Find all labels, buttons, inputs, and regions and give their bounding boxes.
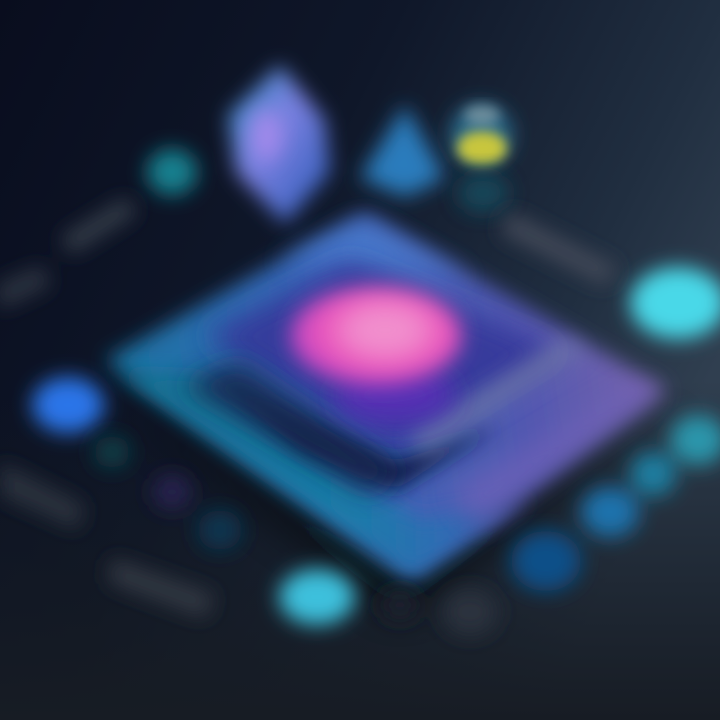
dashes upper left [0, 198, 138, 310]
lower dashes [0, 462, 215, 618]
upper blue glow [280, 222, 470, 280]
icon: yellow orb [450, 104, 512, 213]
pink orb highlight [340, 304, 430, 356]
pink orb [290, 286, 462, 386]
node: cyan bottom [279, 569, 355, 625]
central platform [105, 212, 668, 578]
inner dark tray [205, 262, 560, 450]
dark band [180, 360, 400, 495]
icon: crystal gem [228, 65, 330, 224]
dash upper right [500, 212, 618, 285]
lower right light panel [450, 385, 655, 525]
platform shadow [100, 390, 690, 610]
grey ridge [410, 338, 585, 455]
platform front edge [118, 372, 530, 578]
platform top surface [105, 212, 668, 578]
dark recess lower left [205, 372, 500, 490]
right node row [511, 415, 720, 591]
lower left small nodes [94, 436, 242, 550]
node: cyan pill right [630, 267, 720, 339]
node: blue left [32, 377, 104, 433]
purple under glow [335, 367, 455, 423]
bottom grey nodes [380, 588, 498, 636]
icon: blue pyramid [360, 105, 445, 197]
icon: teal dot top left [147, 149, 197, 195]
